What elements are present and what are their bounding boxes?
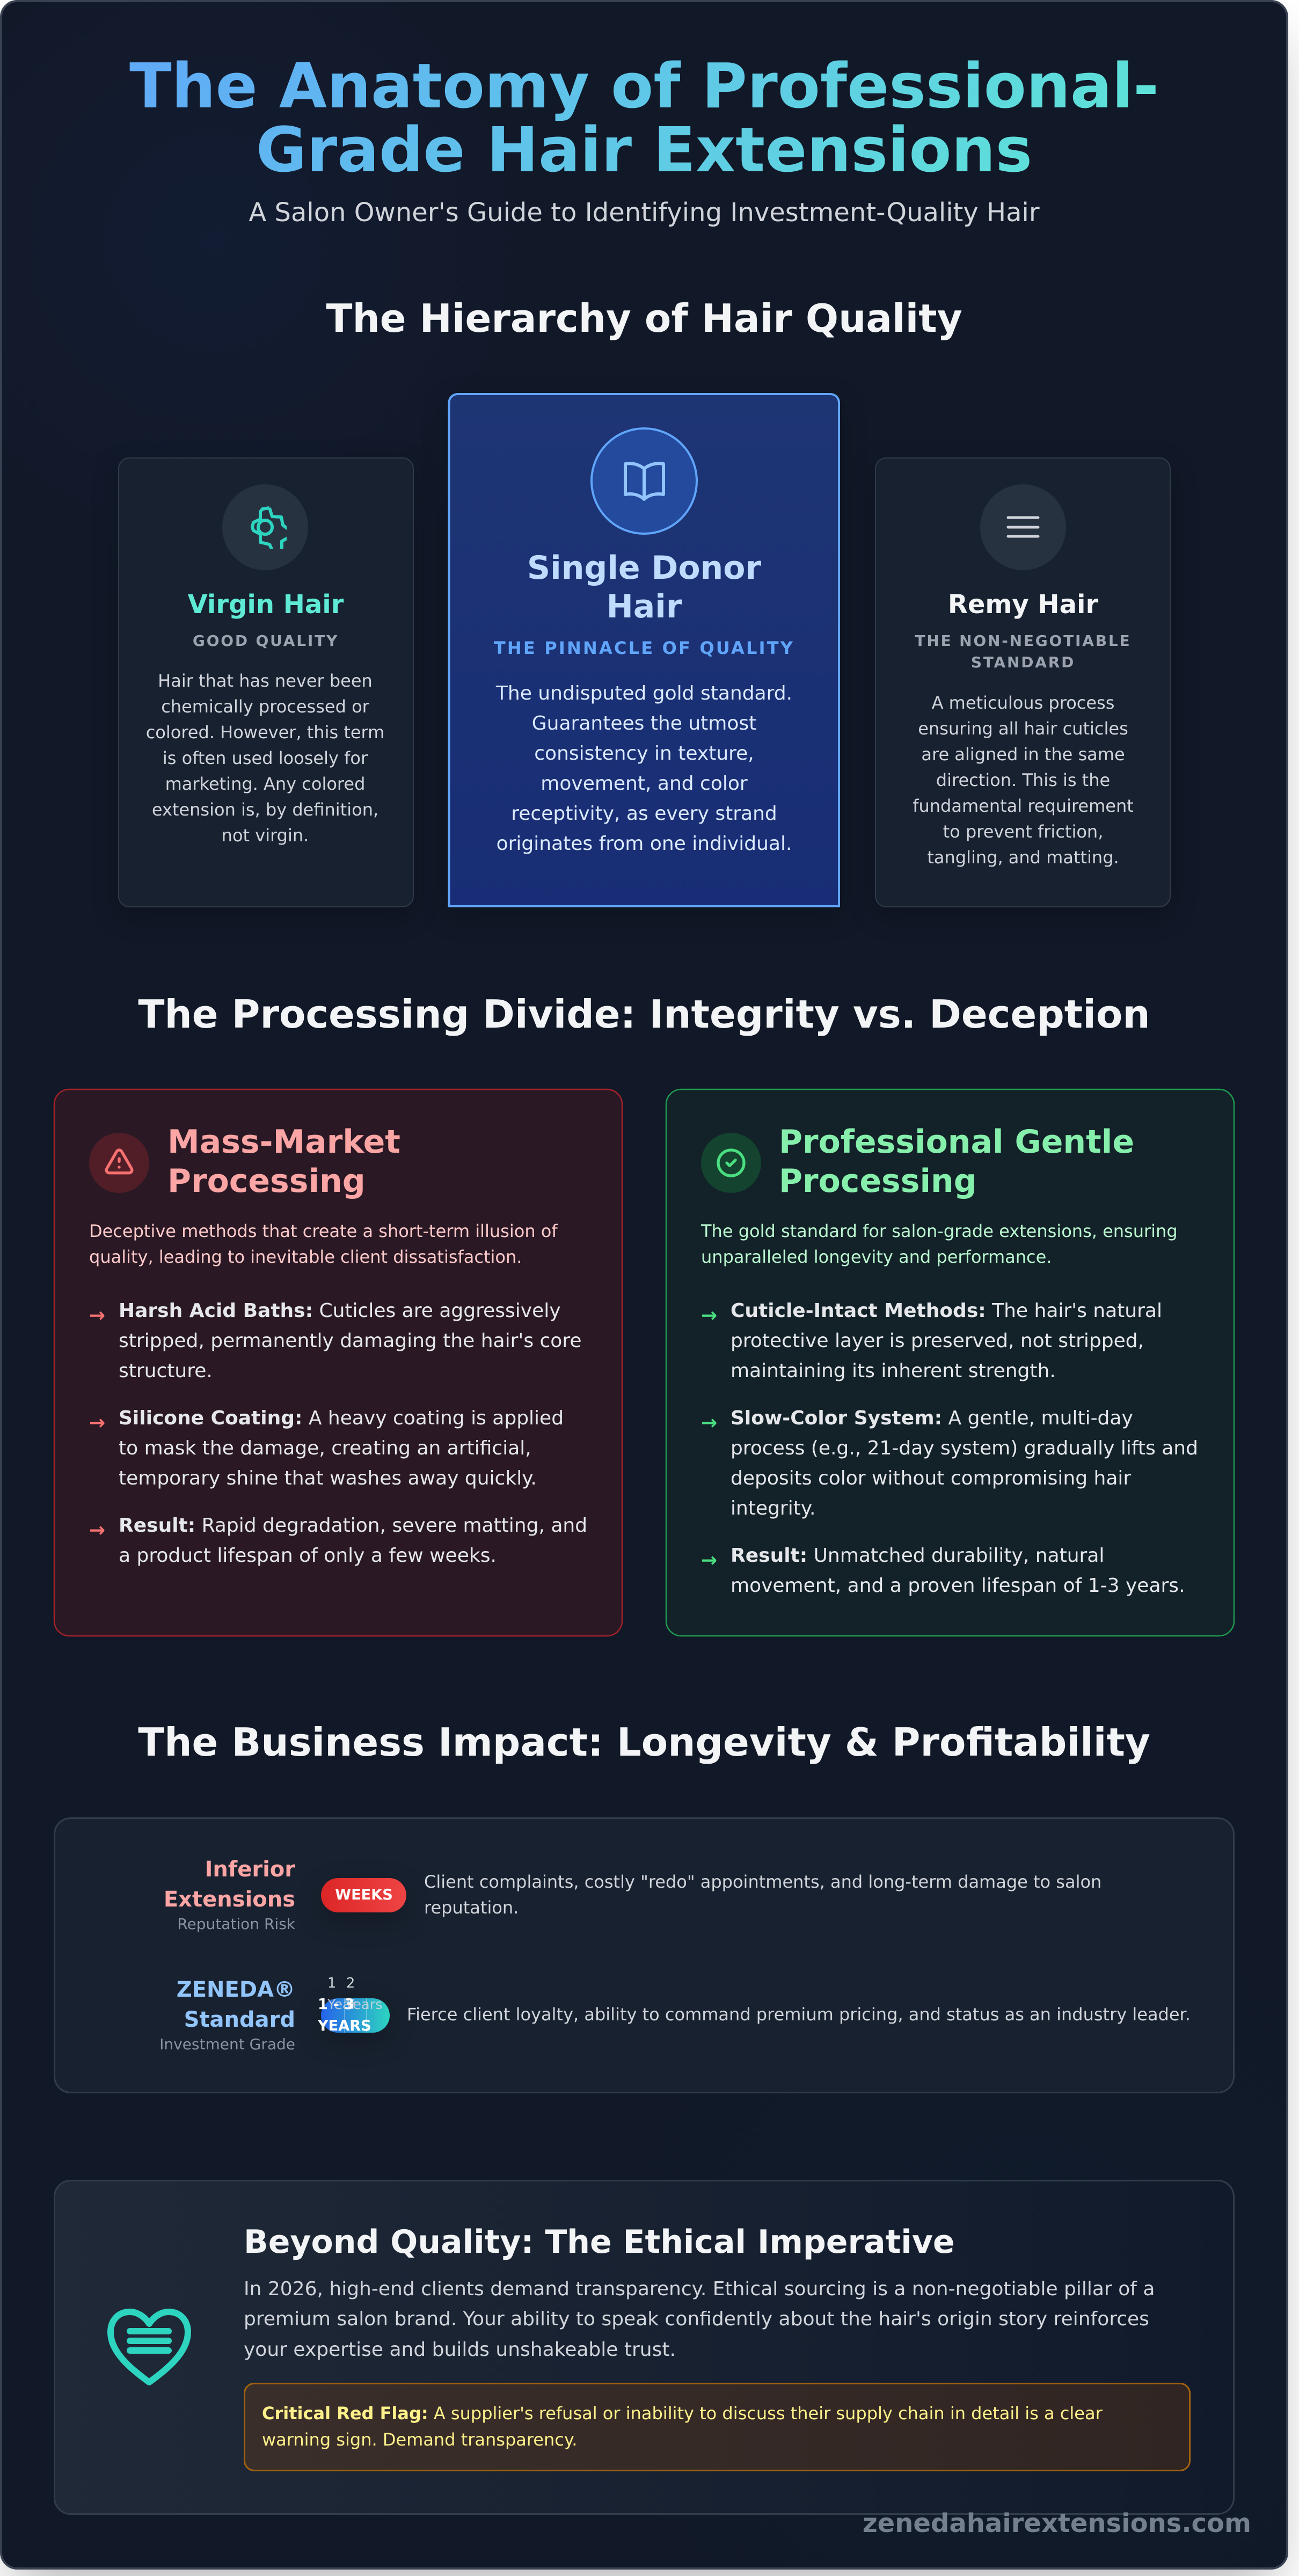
pill: years timeline: Year xyxy=(327,1997,357,2013)
professional list: deposits color without compromising hair xyxy=(731,1467,1131,1489)
virgin hair description: not virgin. xyxy=(222,825,309,846)
pill: years timeline: YEARS xyxy=(317,2018,371,2034)
mass-market heading: Processing xyxy=(167,1162,366,1200)
subtitle: A Salon Owner's Guide to Identifying Investment-Quality Hair xyxy=(249,198,1040,228)
professional description: unparalleled longevity and performance. xyxy=(701,1247,1052,1267)
mass-market heading: Mass-Market xyxy=(167,1123,400,1161)
remy hair description: direction. This is the xyxy=(936,770,1110,790)
pill: weeks xyxy=(321,1878,406,1912)
mass-market list: Result: Rapid degradation, severe matting, and xyxy=(119,1515,587,1537)
zeneda standard label: Investment Grade xyxy=(159,2035,295,2053)
title: Grade Hair Extensions xyxy=(256,114,1032,186)
footer website: zenedahairextensions.com xyxy=(863,2508,1251,2538)
icon: heart with lines xyxy=(111,2312,188,2382)
single donor description: consistency in texture, xyxy=(534,743,754,765)
single donor description: Guarantees the utmost xyxy=(532,712,756,734)
single donor description xyxy=(495,682,792,855)
panel: ethical imperative xyxy=(55,2181,1234,2514)
panel: single donor hair xyxy=(449,394,839,906)
remy hair heading: Remy Hair xyxy=(948,590,1098,620)
icon: aligned lines xyxy=(980,484,1066,570)
ethical body: your expertise and builds unshakeable trust. xyxy=(244,2339,676,2361)
virgin hair description: is often used loosely for xyxy=(163,748,368,768)
professional list: → xyxy=(701,1549,717,1571)
zeneda standard label: Standard xyxy=(184,2007,295,2032)
heading: business impact: The Business Impact: Longevity & Profitability xyxy=(138,1720,1150,1765)
icon: open book xyxy=(592,428,697,534)
mass-market list: a product lifespan of only a few weeks. xyxy=(119,1545,497,1567)
professional heading xyxy=(779,1123,1134,1200)
heading: hierarchy of hair quality: The Hierarchy of Hair Quality xyxy=(326,296,962,341)
mass-market list: structure. xyxy=(119,1360,213,1382)
virgin hair description: marketing. Any colored xyxy=(165,774,365,794)
professional list: process (e.g., 21-day system) gradually lifts and xyxy=(731,1437,1198,1459)
remy hair description: to prevent friction, xyxy=(943,821,1103,842)
mass-market heading xyxy=(167,1123,400,1200)
icon: gear xyxy=(222,484,308,570)
remy hair description: A meticulous process xyxy=(932,693,1114,713)
professional list xyxy=(701,1300,1198,1597)
professional list: movement, and a proven lifespan of 1-3 years. xyxy=(731,1575,1185,1597)
virgin hair description xyxy=(146,671,384,846)
remy hair label: STANDARD xyxy=(971,653,1075,671)
zeneda standard label: ZENEDA® xyxy=(177,1977,295,2002)
mass-market list: temporary shine that washes away quickly. xyxy=(119,1467,537,1489)
virgin hair description: extension is, by definition, xyxy=(152,799,378,820)
mass-market description: Deceptive methods that create a short-term illusion of xyxy=(89,1221,558,1241)
remy hair description xyxy=(913,693,1134,868)
professional heading: Processing xyxy=(779,1162,977,1200)
professional list: Result: Unmatched durability, natural xyxy=(731,1545,1104,1567)
professional list: maintaining its inherent strength. xyxy=(731,1360,1056,1382)
single donor description: The undisputed gold standard. xyxy=(495,682,792,704)
inferior extensions label: Extensions xyxy=(164,1887,295,1912)
ethical body: premium salon brand. Your ability to speak confidently about the hair's origin story reinforces xyxy=(244,2308,1149,2330)
remy hair description: ensuring all hair cuticles xyxy=(918,718,1128,739)
title xyxy=(129,50,1159,186)
mass-market list: stripped, permanently damaging the hair's core xyxy=(119,1330,582,1352)
inferior description: reputation. xyxy=(424,1897,519,1918)
panel: virgin hair xyxy=(119,458,413,907)
mass-market list: → xyxy=(89,1412,105,1434)
remy hair description: tangling, and matting. xyxy=(927,847,1119,868)
mass-market list: → xyxy=(89,1519,105,1541)
inferior extensions label: Inferior xyxy=(205,1857,295,1882)
title: The Anatomy of Professional- xyxy=(129,50,1159,122)
pill: years timeline xyxy=(317,1975,390,2034)
pill: years timeline: 1 xyxy=(327,1975,336,1991)
mass-market list: to mask the damage, creating an artificial, xyxy=(119,1437,531,1459)
mass-market description: quality, leading to inevitable client dissatisfaction. xyxy=(89,1247,522,1267)
pill: years timeline: 2 xyxy=(346,1975,355,1991)
professional description xyxy=(700,1221,1178,1267)
mass-market list xyxy=(89,1300,587,1567)
professional heading: Professional Gentle xyxy=(779,1123,1134,1161)
icon: check circle xyxy=(701,1133,761,1193)
pill: years timeline: 1 - 3 xyxy=(318,1996,354,2013)
professional list: protective layer is preserved, not stripped, xyxy=(731,1330,1144,1352)
zeneda description: Fierce client loyalty, ability to command premium pricing, and status as an industry leader. xyxy=(407,2004,1191,2025)
single donor description: receptivity, as every strand xyxy=(511,803,777,825)
professional list: integrity. xyxy=(731,1497,815,1519)
ethical body: In 2026, high-end clients demand transparency. Ethical sourcing is a non-negotiable pillar of a xyxy=(244,2278,1155,2300)
single donor heading: Single Donor xyxy=(527,549,761,587)
mass-market description xyxy=(89,1221,558,1267)
professional list: → xyxy=(701,1305,717,1327)
inferior extensions label xyxy=(164,1857,296,1933)
single donor label: THE PINNACLE OF QUALITY xyxy=(494,638,794,658)
zeneda standard label xyxy=(159,1977,295,2053)
mass-market list: → xyxy=(89,1305,105,1327)
heading: processing divide: The Processing Divide: Integrity vs. Deception xyxy=(138,992,1150,1037)
inferior description xyxy=(424,1872,1101,1918)
panel: remy hair xyxy=(875,458,1170,907)
professional list: Slow-Color System: A gentle, multi-day xyxy=(731,1407,1133,1429)
professional list: Cuticle-Intact Methods: The hair's natural xyxy=(731,1300,1162,1322)
panel: mass-market processing xyxy=(54,1089,622,1636)
virgin hair heading: Virgin Hair xyxy=(188,590,344,620)
icon: warning triangle xyxy=(89,1133,149,1193)
remy hair description: fundamental requirement xyxy=(913,796,1134,816)
virgin hair description: chemically processed or xyxy=(161,696,370,717)
mass-market list: Harsh Acid Baths: Cuticles are aggressively xyxy=(119,1300,561,1322)
virgin hair description: colored. However, this term xyxy=(146,722,384,743)
remy hair label xyxy=(915,632,1131,671)
callout: critical red flag: Critical Red Flag: A supplier's refusal or inability to discuss their supply chain in detail is a clear xyxy=(262,2403,1103,2424)
remy hair description: are aligned in the same xyxy=(921,744,1125,765)
ethical body xyxy=(244,2278,1155,2361)
virgin hair description: Hair that has never been xyxy=(158,671,373,691)
single donor heading: Hair xyxy=(607,588,682,625)
inferior description: Client complaints, costly "redo" appointments, and long-term damage to salon xyxy=(424,1872,1101,1892)
inferior extensions label: Reputation Risk xyxy=(177,1915,296,1933)
panel: business impact comparison xyxy=(55,1818,1234,2093)
callout: critical red flag xyxy=(245,2384,1189,2471)
single donor description: movement, and color xyxy=(541,773,748,795)
panel: professional gentle processing xyxy=(666,1089,1234,1636)
ethical heading: Beyond Quality: The Ethical Imperative xyxy=(244,2223,955,2261)
professional list: → xyxy=(701,1412,717,1434)
pill: years timeline: Years xyxy=(346,1997,383,2013)
callout: critical red flag: warning sign. Demand transparency. xyxy=(262,2429,577,2450)
single donor description: originates from one individual. xyxy=(497,833,792,855)
virgin hair label: GOOD QUALITY xyxy=(193,632,339,650)
remy hair label: THE NON-NEGOTIABLE xyxy=(915,632,1131,650)
pill: weeks: WEEKS xyxy=(335,1887,393,1903)
single donor heading xyxy=(527,549,761,625)
mass-market list: Silicone Coating: A heavy coating is applied xyxy=(119,1407,564,1429)
professional description: The gold standard for salon-grade extensions, ensuring xyxy=(700,1221,1178,1241)
